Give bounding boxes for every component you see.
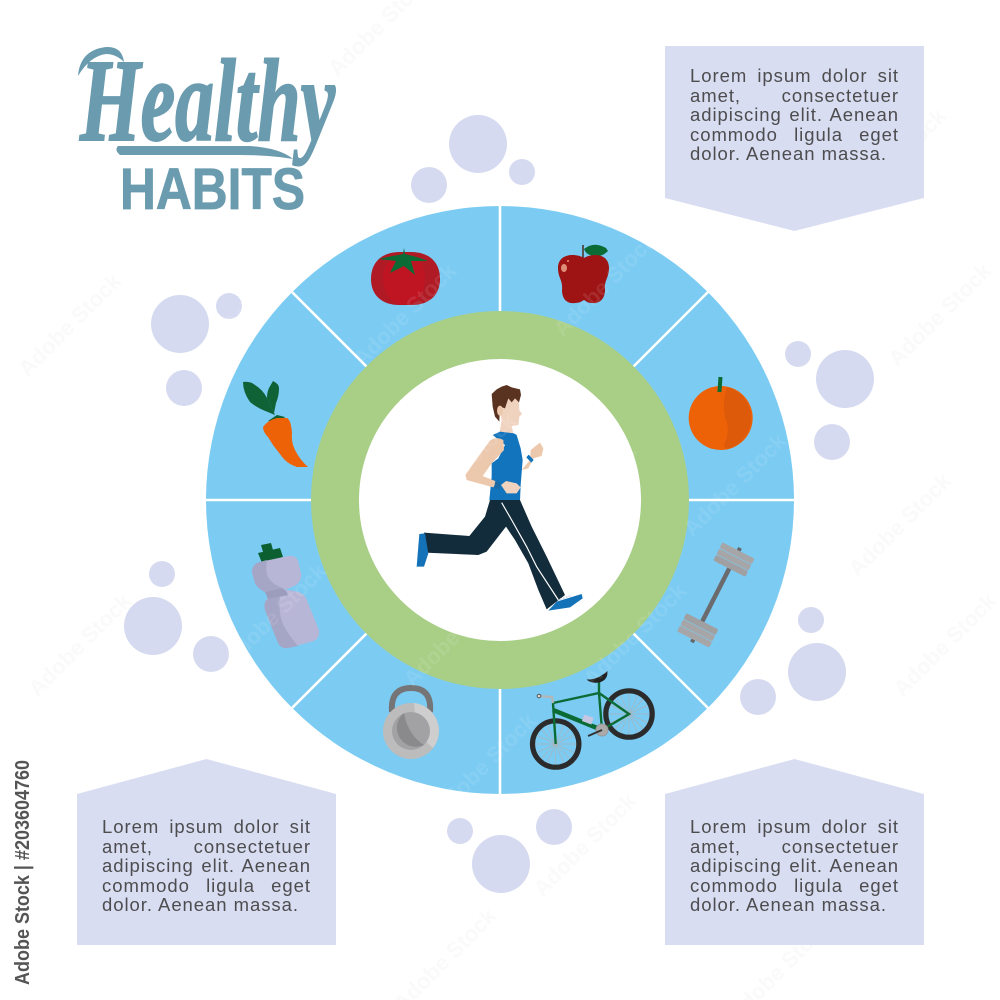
main graphic: Adobe Stock <box>428 708 542 821</box>
main graphic: Adobe Stock <box>888 588 1000 701</box>
icon: tomato <box>371 248 440 305</box>
panel: bottom right text: Lorem ipsum dolor sit <box>690 816 899 837</box>
segmented blue ring <box>206 206 794 794</box>
title word: HABITS: HABITS <box>120 157 305 222</box>
main graphic: Adobe Stock <box>843 468 957 581</box>
icon: bicycle <box>529 672 655 770</box>
green ring <box>335 335 665 665</box>
panel: bottom right text: commodo ligula eget <box>690 875 899 896</box>
panel: bottom left text: adipiscing elit. Aenean <box>102 855 311 876</box>
title underline swash <box>116 146 293 159</box>
main graphic: Adobe Stock <box>883 258 997 371</box>
icon: dumbbell <box>676 540 756 650</box>
icon: apple <box>558 245 609 303</box>
title flourish <box>78 47 124 76</box>
icon: orange <box>689 377 753 450</box>
panel: bottom left text: Lorem ipsum dolor sit <box>102 816 311 837</box>
main graphic: Adobe Stock <box>408 408 522 521</box>
panel: top right text: amet, consectetuer <box>690 85 899 106</box>
panel: top right text <box>665 46 924 231</box>
main graphic: Adobe Stock <box>528 788 642 901</box>
icon: water bottle <box>252 543 319 648</box>
main graphic: Adobe Stock <box>398 578 512 691</box>
icon: runner <box>417 385 583 611</box>
panel: top right text: Lorem ipsum dolor sit <box>690 65 899 86</box>
panel: top right text: adipiscing elit. Aenean <box>690 104 899 125</box>
panel: bottom right text <box>665 759 924 945</box>
main graphic: Adobe Stock <box>678 428 792 541</box>
panel: top right text: commodo ligula eget <box>690 124 899 145</box>
panel: bottom left text: dolor. Aenean massa. <box>102 894 299 915</box>
main graphic: Adobe Stock <box>528 438 642 551</box>
title <box>78 35 336 222</box>
panel: bottom right text: amet, consectetuer <box>690 836 899 857</box>
panel: bottom left text: commodo ligula eget <box>102 875 311 896</box>
main graphic: Adobe Stock <box>218 223 332 336</box>
panel: bottom left text <box>77 759 336 945</box>
main graphic: Adobe Stock <box>13 268 127 381</box>
main graphic: Adobe Stock <box>548 228 662 341</box>
panel: bottom left text: amet, consectetuer <box>102 836 311 857</box>
icon: kettlebell <box>383 688 439 759</box>
main graphic: Adobe Stock <box>23 588 137 701</box>
main graphic: Adobe Stock <box>838 103 952 216</box>
panel: bottom right text: dolor. Aenean massa. <box>690 894 887 915</box>
main graphic: Adobe Stock <box>578 578 692 691</box>
title word: Healthy: Healthy <box>79 35 336 166</box>
panel: top right text: dolor. Aenean massa. <box>690 143 887 164</box>
icon: carrot <box>243 381 308 467</box>
stock id label: Adobe Stock | #203604760 <box>12 760 34 985</box>
main graphic: Adobe Stock <box>348 258 462 371</box>
panel: bottom right text: adipiscing elit. Aenean <box>690 855 899 876</box>
decorative bubbles <box>124 115 874 893</box>
main graphic: Adobe Stock <box>218 558 332 671</box>
